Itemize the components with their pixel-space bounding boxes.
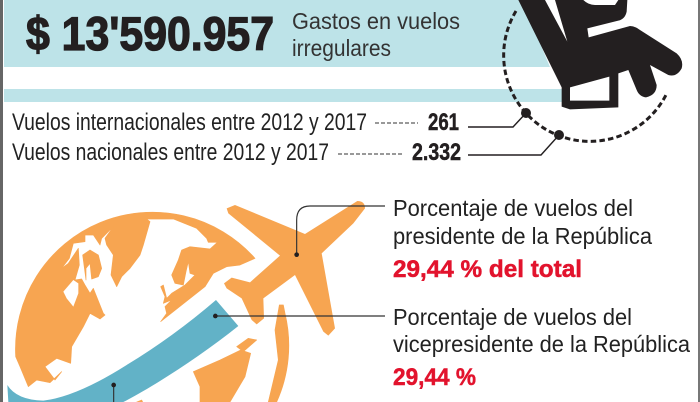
amount description: irregulares [292,35,391,61]
plane leader line [294,206,385,257]
president label: presidente de la República [393,223,652,249]
icon: passenger seat [518,0,682,109]
vice president label: Porcentaje de vuelos del [393,304,632,330]
swoosh leader line [213,314,385,318]
lower teal band [4,89,562,102]
international flights row: Vuelos internacionales entre 2012 y 2017 [12,109,367,136]
national flights row [12,130,564,166]
globe with plane illustration [7,201,385,402]
national flights row: 2.332 [412,139,461,166]
icon: airplane [224,201,365,336]
vice president label: 29,44 % [393,364,476,391]
amount description [292,8,460,61]
hudson bay [63,280,78,307]
national flights row: Vuelos nacionales entre 2012 y 2017 [12,139,329,166]
international flights row: 261 [428,109,459,136]
amount description: Gastos en vuelos [292,8,460,34]
president label: 29,44 % del total [393,256,582,283]
president label: Porcentaje de vuelos del [393,195,633,221]
vice president label [393,304,690,391]
dashed circle [504,11,667,141]
vice president label: vicepresidente de la República [393,331,690,357]
lower leader line [111,383,116,402]
top teal band [4,0,550,67]
flight swoosh [7,300,238,402]
president label [393,195,652,283]
total amount: $ 13'590.957 [26,7,274,60]
globe continents [15,212,289,402]
